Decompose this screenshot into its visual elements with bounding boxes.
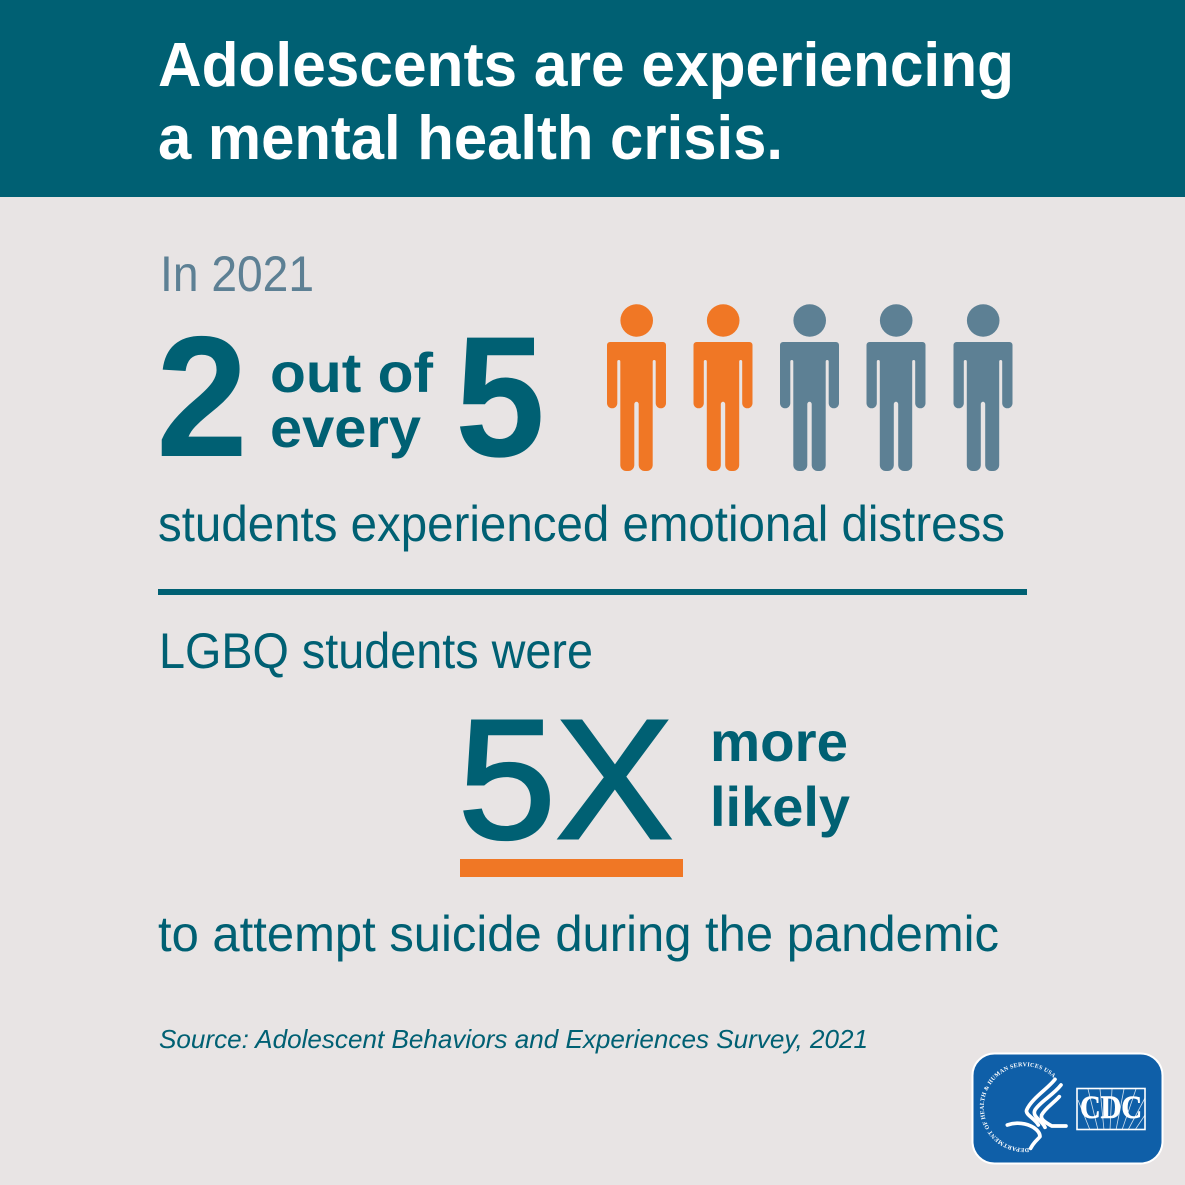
title (158, 31, 1014, 173)
title: a mental health crisis. (158, 104, 783, 173)
statistic: 2 out of every 5: 2 (156, 301, 248, 493)
statistic: 2 out of every 5: out of (270, 341, 433, 404)
statistic: 5X more likely (458, 685, 850, 875)
icon: blue person 5 (953, 304, 1013, 471)
orange underline (460, 859, 683, 877)
text: attempt suicide: to attempt suicide during the pandemic (158, 906, 999, 962)
statistic: 2 out of every 5 (156, 301, 545, 493)
icon: blue person 3 (780, 304, 839, 471)
text: LGBQ students: LGBQ students were (159, 623, 593, 679)
year label: In 2021 (160, 246, 314, 302)
icon: blue person 4 (866, 304, 926, 471)
statistic: 2 out of every 5: every (270, 396, 421, 459)
icon: orange person 1 (607, 304, 666, 471)
statistic: 5X more likely: 5X (458, 685, 673, 875)
title: Adolescents are experiencing (158, 31, 1014, 100)
source: Source: Adolescent Behaviors and Experiences Survey, 2021 (159, 1024, 868, 1054)
logo: CDC box: CDC (1080, 1090, 1142, 1126)
icon: orange person 2 (693, 304, 753, 471)
icon: HHS eagle (1007, 1079, 1066, 1148)
pictogram: five people (607, 304, 1013, 471)
logo: HHS and CDC (972, 1052, 1164, 1164)
logo: HHS and CDC: DEPARTMENT OF HEALTH & HUMAN SERVICES USA (980, 1062, 1055, 1152)
statistic: 2 out of every 5: 5 (455, 301, 545, 493)
text: emotional distress: students experienced emotional distress (158, 496, 1005, 552)
header band (0, 0, 1185, 197)
logo: HHS seal text (984, 1066, 1062, 1148)
statistic: 5X more likely: more (710, 710, 848, 773)
statistic: 5X more likely: likely (710, 775, 850, 838)
